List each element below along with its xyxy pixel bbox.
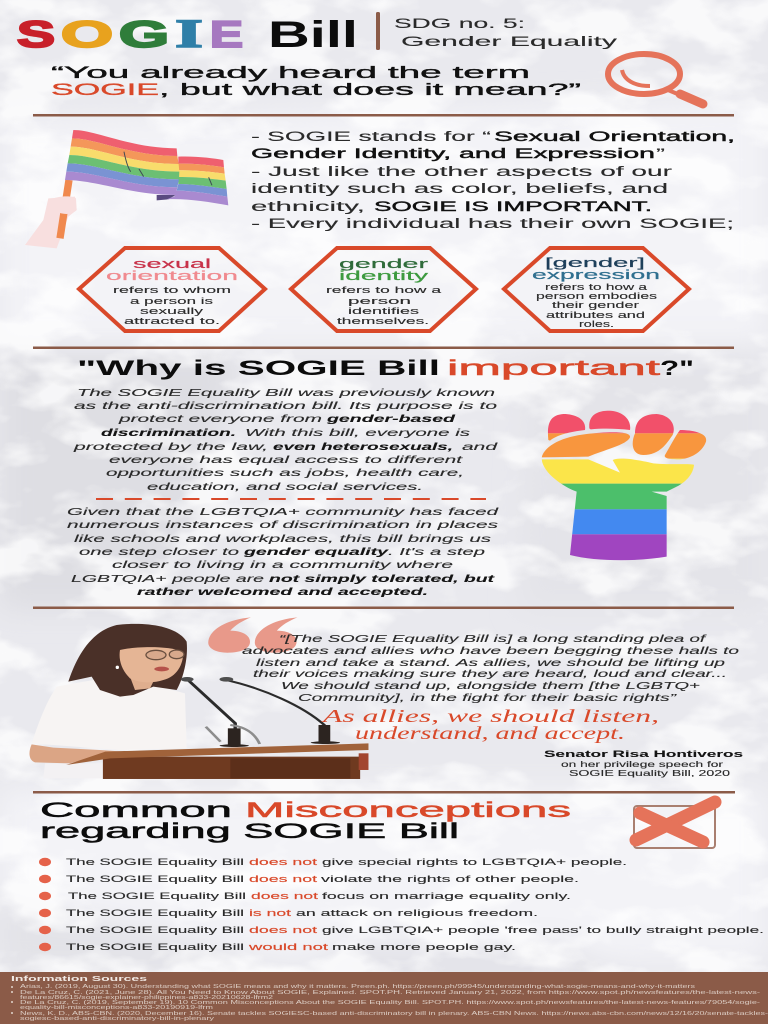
text block: purpose of the bill: even heterosexuals, — [273, 441, 453, 453]
text block: LGBTQIA+ discrimination — [67, 506, 500, 598]
footer: information sources: features/86615/sogie-explainer-philippines-a833-20210628-lfrm2 — [20, 995, 273, 1001]
footer: information sources: News, K. D., ABS-CBN. (2020, December 16). Senate tackles SOGIESC-based anti-discriminatory bill in plenary. ABS-CBN News. https://news.abs-cbn.com/news/12/16/20/senate-tackles- — [20, 1011, 768, 1017]
panel: gender expression hexagon: attributes and — [546, 310, 645, 320]
item 4: an attack on religious freedom. — [296, 908, 538, 919]
panel: sexual orientation hexagon: refers to whom — [113, 285, 231, 296]
heading: common misconceptions: Misconceptions — [245, 799, 571, 822]
item 5: The SOGIE Equality Bill — [66, 925, 244, 936]
text block: LGBTQIA+ discrimination: numerous instances of discrimination in places — [67, 519, 499, 531]
subtitle: SDG no. 5: Gender Equality — [401, 33, 617, 49]
text block: purpose of the bill: protected by the law, — [72, 441, 268, 453]
item 3: The SOGIE Equality Bill — [68, 891, 246, 902]
text block: LGBTQIA+ discrimination: not simply tolerated, but — [269, 573, 495, 585]
item 2: The SOGIE Equality Bill — [66, 874, 244, 885]
text block: LGBTQIA+ discrimination: LGBTQIA+ people are — [71, 573, 264, 585]
quote attribution: Senator Risa Hontiveros — [544, 749, 743, 760]
text block: SOGIE definition — [251, 129, 735, 231]
title: O — [61, 14, 113, 55]
title — [17, 11, 358, 56]
text block: purpose of the bill: discrimination. — [101, 427, 236, 439]
quote attribution: on her privilege speech for — [561, 760, 723, 769]
dashed separator — [96, 498, 486, 500]
text block: LGBTQIA+ discrimination: rather welcomed and accepted. — [137, 586, 428, 598]
text block: SOGIE definition: - Every individual has their own SOGIE; — [251, 216, 734, 231]
text block: purpose of the bill: education, and social services. — [147, 481, 423, 493]
footer: information sources: equality-bill-misconceptions-a833-20190919-lfrm — [20, 1005, 213, 1011]
item 4: The SOGIE Equality Bill — [66, 908, 244, 919]
item 2: violate the rights of other people. — [321, 874, 579, 885]
icon: magnifying glass — [608, 54, 703, 104]
text block: purpose of the bill — [72, 387, 499, 493]
footer: information sources: Information Sources — [11, 974, 147, 983]
panel: sexual orientation hexagon: orientation — [106, 269, 238, 283]
icon: rainbow flag in hand — [25, 130, 228, 248]
heading: what does it mean: , but what does it mean?” — [159, 80, 582, 99]
panel: sexual orientation hexagon: sexual — [133, 257, 211, 271]
item 6: The SOGIE Equality Bill — [66, 942, 244, 953]
subtitle: SDG no. 5 — [394, 15, 617, 49]
panel: gender expression hexagon: [gender] — [545, 256, 645, 270]
text block: SOGIE definition: ” — [656, 146, 665, 161]
item 5: give LGBTQIA+ people 'free pass' to bully straight people. — [322, 925, 764, 936]
item 2 — [39, 874, 579, 885]
text block: purpose of the bill: and — [462, 441, 499, 453]
item 2: does not — [249, 874, 318, 885]
item 3: focus on marriage equality only. — [322, 891, 571, 902]
panel: sexual orientation hexagon — [79, 248, 265, 331]
text block: SOGIE definition: Sexual Orientation, — [494, 129, 735, 144]
item 3 — [39, 891, 571, 902]
text block: SOGIE definition: - Just like the other aspects of our — [251, 164, 673, 179]
heading: why is SOGIE Bill important: "Why is SOGIE Bill — [77, 357, 440, 380]
text block: LGBTQIA+ discrimination: closer to living in a community where — [112, 559, 453, 571]
text block: LGBTQIA+ discrimination: . It's a step — [388, 546, 485, 558]
subtitle: SDG no. 5: SDG no. 5: — [394, 15, 525, 31]
item 6: make more people gay. — [332, 942, 516, 953]
heading: common misconceptions: Common — [40, 799, 232, 822]
item 1 — [39, 857, 627, 868]
text block: purpose of the bill: With this bill, everyone is — [245, 427, 471, 439]
script callout: as allies — [321, 706, 659, 743]
title divider — [376, 12, 380, 50]
text block: senator quote: advocates and allies who have been begging these halls to — [242, 645, 739, 657]
item 5 — [39, 925, 764, 936]
photo: senator at podium — [29, 624, 368, 779]
text block: LGBTQIA+ discrimination: one step closer to — [79, 546, 239, 558]
panel: gender identity hexagon: themselves. — [337, 316, 429, 327]
text block: SOGIE definition: identity such as color, beliefs, and — [251, 181, 668, 196]
text block: purpose of the bill: everyone has equal access to different — [109, 454, 464, 466]
item 1: give special rights to LGBTQIA+ people. — [322, 857, 627, 868]
text block: SOGIE definition: - SOGIE stands for “ — [251, 129, 491, 144]
heading: what does it mean — [51, 63, 582, 99]
text block: purpose of the bill: as the anti-discrimination bill. Its purpose is to — [74, 400, 497, 412]
quote attribution — [544, 749, 743, 778]
text block: senator quote — [242, 633, 739, 704]
title: I — [175, 11, 203, 56]
panel: gender identity hexagon: person — [348, 296, 411, 307]
panel: gender expression hexagon: expression — [532, 268, 660, 282]
footer: information sources: De La Cruz, C. (2019, September 19). 10 Common Misconceptions About the SOGIE Equality Bill. SPOT.PH. https://www.spot.ph/newsfeatures/the-latest-news-features/79054/sogie- — [20, 1000, 761, 1006]
text block: senator quote: their voices making sure they are heard, loud and clear... — [253, 668, 727, 680]
text block: purpose of the bill: gender-based — [325, 413, 456, 425]
heading: what does it mean: SOGIE — [51, 80, 159, 99]
item 1: The SOGIE Equality Bill — [66, 857, 244, 868]
panel: sexual orientation hexagon: a person is — [130, 296, 213, 307]
item 5: does not — [249, 925, 318, 936]
text block: senator quote: We should stand up, alongside them [the LGBTQ+ — [281, 680, 700, 692]
quote attribution: SOGIE Equality Bill, 2020 — [569, 769, 731, 778]
text block: SOGIE definition: SOGIE IS IMPORTANT. — [374, 199, 652, 214]
text block: senator quote: listen and take a stand. As allies, we should be lifting up — [256, 657, 725, 669]
text block: LGBTQIA+ discrimination: gender equality — [242, 546, 390, 558]
text block: LGBTQIA+ discrimination: Given that the LGBTQIA+ community has faced — [67, 506, 500, 518]
heading: why is SOGIE Bill important: ?" — [660, 357, 694, 380]
heading: common misconceptions — [40, 799, 571, 843]
text block: LGBTQIA+ discrimination: like schools and workplaces, this bill brings us — [74, 533, 492, 545]
text block: purpose of the bill: The SOGIE Equality Bill was previously known — [77, 387, 495, 399]
footer: information sources: sogiesc-based-anti-discriminatory-bill-in-plenary — [20, 1016, 215, 1022]
panel: gender identity hexagon: refers to how a — [326, 285, 442, 296]
text block: senator quote: Community], in the fight for their basic rights” — [298, 692, 677, 704]
panel: sexual orientation hexagon: sexually — [140, 306, 203, 317]
panel: gender identity hexagon: identifies — [348, 306, 419, 317]
text block: SOGIE definition: Gender Identity, and Expression — [251, 146, 655, 161]
icon: rainbow fist — [542, 410, 706, 560]
panel: gender expression hexagon: refers to how a — [545, 282, 647, 292]
title: E — [210, 14, 243, 55]
panel: gender expression hexagon — [504, 248, 689, 331]
panel: gender identity hexagon: identity — [339, 269, 430, 283]
panel: gender expression hexagon: person embodies — [536, 291, 658, 301]
script callout: as allies: understand, and accept. — [355, 723, 625, 743]
footer: information sources: Arias, J. (2019, August 30). Understanding what SOGIE means and why it matters. Preen.ph. https://preen.ph/99945/understanding-what-sogie-means-and-why-it-matters — [20, 984, 696, 990]
item 4: is not — [249, 908, 292, 919]
icon: crossed box — [634, 802, 715, 848]
misconception list — [39, 857, 764, 953]
panel: gender expression hexagon: roles. — [579, 319, 614, 329]
heading: common misconceptions: regarding SOGIE Bill — [40, 820, 459, 843]
item 4 — [39, 908, 538, 919]
icon: quotation marks — [208, 617, 297, 653]
heading: why is SOGIE Bill important: important — [447, 357, 660, 380]
text block: senator quote: “[The SOGIE Equality Bill is] a long standing plea of — [279, 633, 707, 645]
item 6 — [39, 942, 516, 953]
heading: why is SOGIE Bill important — [77, 357, 694, 380]
item 1: does not — [249, 857, 318, 868]
panel: gender identity hexagon: gender — [339, 257, 428, 271]
footer: information sources: De La Cruz, C. (2021, June 28). All You Need to Know About SOGIE, Explained. SPOT.PH. Retrieved January 21, 2022, from https://www.spot.ph/newsfeatures/the-latest-news- — [20, 990, 761, 996]
item 6: would not — [247, 942, 329, 953]
panel: gender expression hexagon: their gender — [552, 300, 639, 310]
footer: information sources — [0, 972, 768, 1024]
panel: sexual orientation hexagon: attracted to. — [124, 316, 220, 327]
title: Bill — [268, 14, 358, 55]
panel: gender identity hexagon — [291, 248, 476, 331]
text block: purpose of the bill: protect everyone from — [117, 413, 322, 425]
item 3: does not — [251, 891, 319, 902]
title: S — [17, 14, 55, 55]
script callout: as allies: As allies, we should listen, — [321, 706, 659, 726]
text block: purpose of the bill: opportunities such as jobs, health care, — [106, 467, 464, 479]
text block: SOGIE definition: ethnicity, — [251, 199, 365, 214]
title: G — [119, 14, 169, 55]
heading: what does it mean: “You already heard the term — [51, 63, 530, 82]
